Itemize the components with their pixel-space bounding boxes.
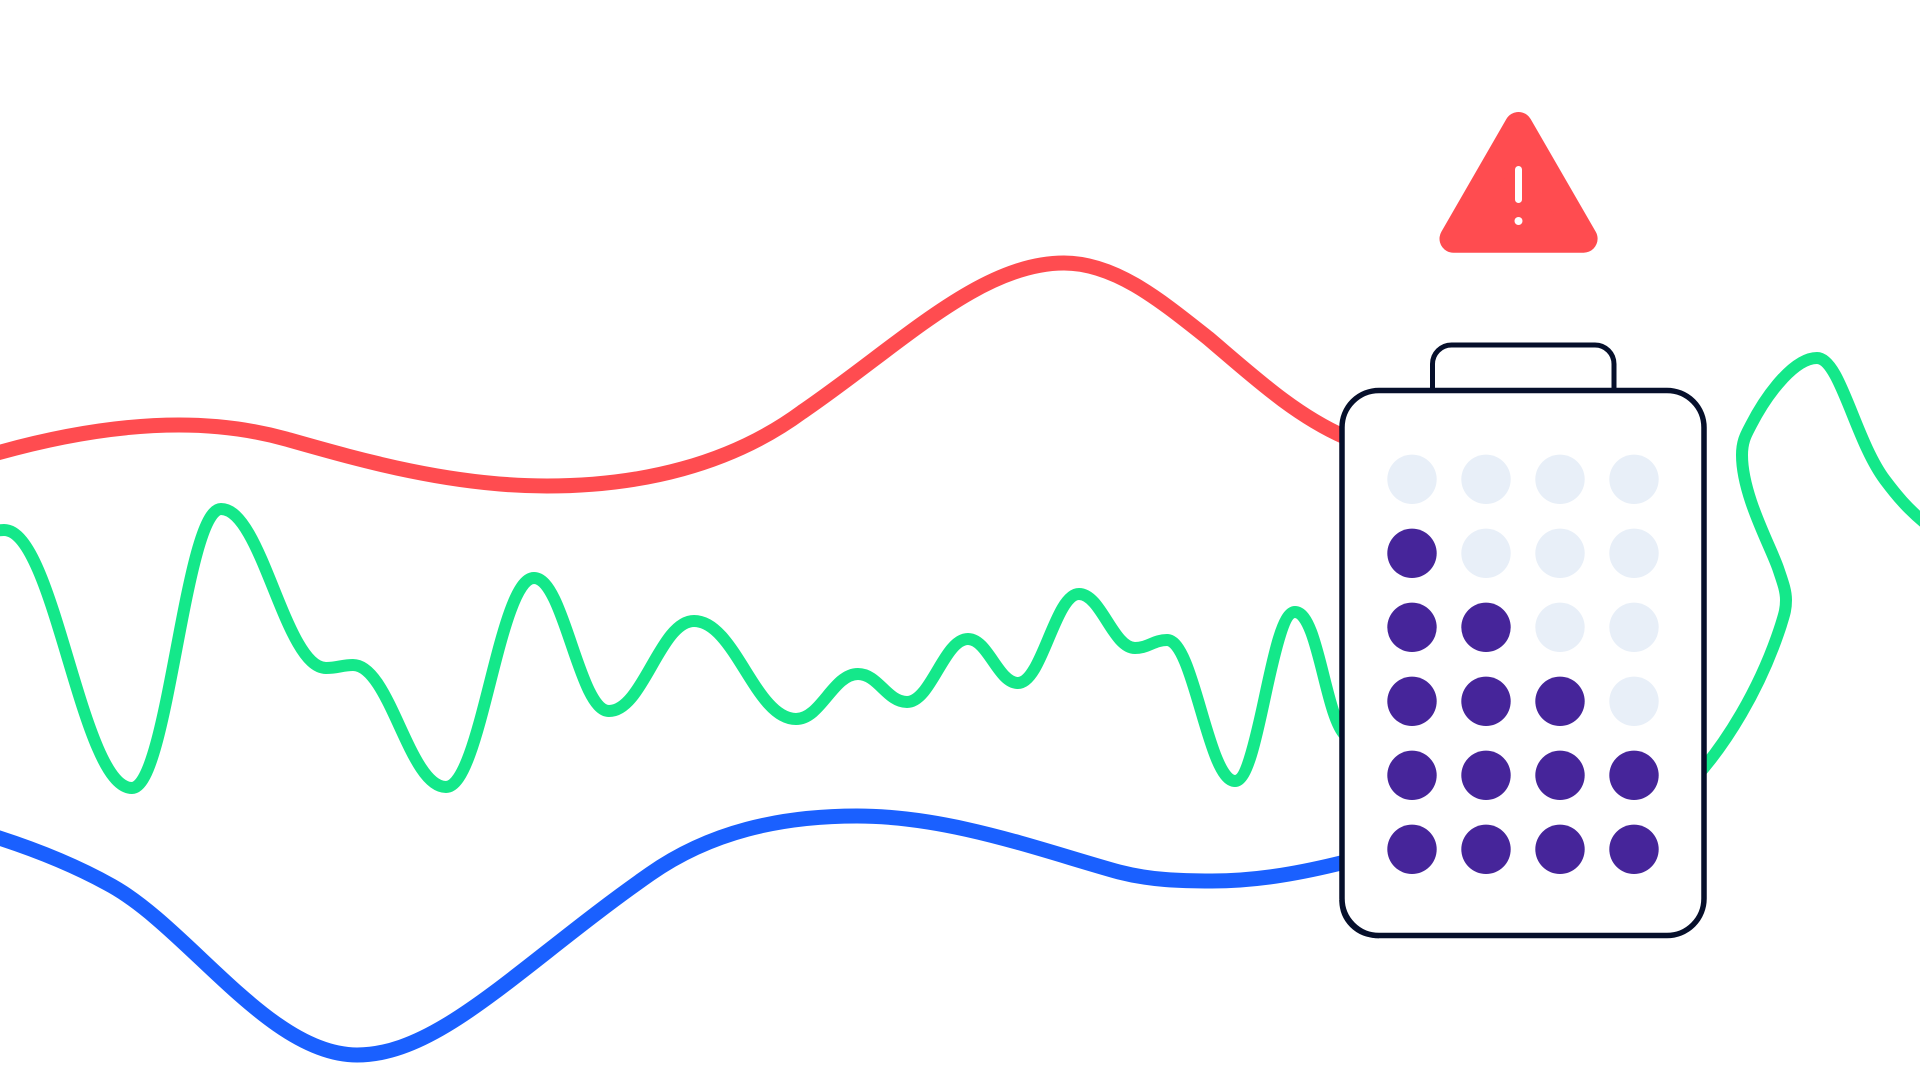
dot grid: 24 dots, filled from the bottom <box>1387 455 1659 874</box>
green line chart: left <box>0 509 1345 788</box>
blue line chart <box>0 816 1345 1055</box>
red line chart <box>0 263 1345 486</box>
green line chart: right <box>1695 358 1920 778</box>
device: handle tab <box>1432 345 1614 390</box>
icon: warning triangle <box>1454 126 1584 239</box>
device: panel body <box>1341 390 1704 936</box>
